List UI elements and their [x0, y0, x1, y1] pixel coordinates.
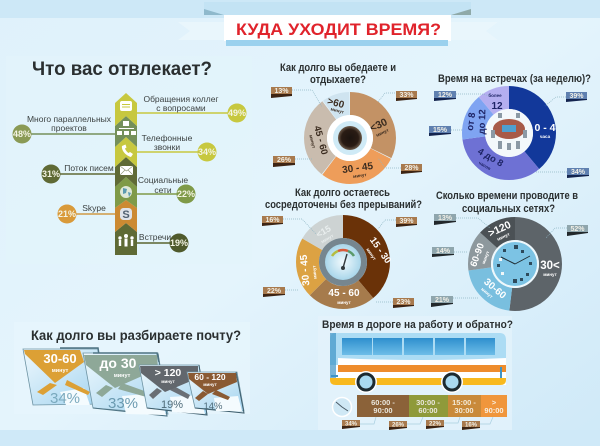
panel: commute	[318, 316, 513, 430]
tag: 26%	[389, 421, 407, 430]
icon: chat	[120, 101, 132, 111]
tag: 16%: 16%	[465, 422, 478, 428]
envelope: 60-120: 60 - 120	[194, 372, 226, 382]
segment labels: lunch: минут	[375, 127, 390, 138]
item: colleagues 49%: 49%	[228, 108, 246, 118]
icon: wheel	[441, 371, 463, 393]
segment labels: meetings: часов	[478, 160, 492, 171]
donut: focus	[308, 226, 378, 298]
panel: distractions	[12, 59, 246, 255]
segment labels: social	[468, 219, 560, 302]
panel: lunch	[271, 62, 422, 179]
tag: 39%: 39%	[569, 93, 584, 100]
item: phone calls 34%: Телефонные	[142, 133, 193, 143]
item: meetings 19%: Встречи	[139, 232, 171, 242]
envelope: >120: минут	[161, 379, 176, 384]
tag: 22%	[263, 287, 285, 297]
tag: 12%	[434, 91, 456, 101]
segment: >90	[481, 395, 507, 417]
segment labels: lunch: <30	[368, 116, 389, 134]
segment: >90: >	[492, 398, 497, 407]
tag: 34%: 34%	[571, 169, 586, 176]
item: meetings 19%: 19%	[170, 238, 188, 248]
tag: 26%: 26%	[277, 157, 292, 164]
tag: 39%	[396, 217, 417, 227]
icon: globe	[120, 186, 132, 198]
heading: social	[436, 190, 578, 215]
icon: people	[118, 234, 134, 246]
segment labels: lunch: >60	[326, 96, 346, 111]
item: skype 21%: Skype	[82, 203, 106, 213]
segment labels: lunch: 30 - 45	[341, 161, 374, 176]
segment: 15-30: 30:00	[454, 406, 474, 415]
segment labels: social: минут	[481, 250, 491, 265]
segment labels: meetings: 0 - 4	[534, 122, 556, 134]
item: skype 21%: 21%	[58, 209, 76, 219]
tag: 34%: 34%	[345, 422, 358, 428]
envelope: до 30: 33%	[108, 395, 138, 412]
envelope: до 30: до 30	[100, 355, 137, 371]
segment labels: lunch: минут	[308, 134, 317, 150]
tag: 15%	[429, 126, 451, 136]
icon: envelope	[120, 166, 133, 175]
segment labels: meetings: до 12	[477, 109, 488, 135]
segment: 15-30	[448, 395, 481, 417]
tag: 14%	[432, 247, 454, 257]
segment labels: focus: минут	[320, 233, 335, 244]
segment labels: social: минут	[480, 287, 494, 300]
envelope: 60-120: минут	[203, 382, 218, 387]
tag: 12%: 12%	[438, 92, 453, 99]
tag: 22%	[426, 420, 444, 429]
segment labels: meetings: от 8	[465, 112, 478, 131]
tag: 22%: 22%	[429, 422, 442, 428]
tag: 13%	[434, 214, 456, 225]
envelope: >120: > 120	[155, 367, 181, 379]
segment labels: meetings: более	[488, 92, 502, 98]
panel: focus	[262, 187, 422, 308]
tag: 14%: 14%	[436, 248, 451, 255]
donut: lunch	[316, 104, 384, 172]
heading: commute: Время в дороге на работу и обратно?	[322, 319, 513, 331]
segment labels: focus	[299, 223, 393, 305]
leaders: social	[453, 218, 567, 298]
connector lines and percent circles	[22, 113, 235, 243]
item: social 22%: сети	[154, 185, 172, 195]
segment labels: focus: минут	[365, 247, 378, 262]
tag: 23%	[393, 298, 414, 308]
icon: hierarchy	[117, 121, 136, 135]
icon: clock	[332, 398, 352, 416]
heading: focus: Как долго остаетесь	[295, 187, 390, 199]
icon: wheel	[355, 371, 377, 393]
tag: 33%: 33%	[399, 92, 414, 99]
title: КУДА УХОДИТ ВРЕМЯ?	[236, 20, 441, 39]
icon: clock	[491, 240, 539, 288]
tag: 39%	[566, 92, 587, 102]
donut: meetings	[474, 98, 544, 168]
segment labels: social: 60-90	[468, 242, 487, 268]
tag: 13%: 13%	[438, 215, 453, 222]
item: parallel projects 48%: проектов	[51, 123, 87, 133]
tag: 34%	[342, 420, 360, 429]
heading: lunch: Как долго вы обедаете и	[280, 62, 396, 74]
tag: 15%: 15%	[433, 127, 448, 134]
heading: lunch	[280, 62, 396, 86]
segment: 60-90: 90:00	[373, 406, 393, 415]
segment labels: lunch: минут	[353, 172, 368, 179]
segment: 30-60: 60:00	[418, 406, 438, 415]
segment labels: social: 30<	[540, 260, 560, 272]
leaders: focus	[283, 219, 396, 302]
tag: 16%	[462, 421, 480, 430]
segment labels: social: минут	[496, 231, 511, 242]
envelope: 30-60	[23, 348, 104, 407]
segment labels: focus: 45 - 60	[328, 288, 360, 299]
item: phone calls 34%: 34%	[198, 147, 216, 157]
segment labels: meetings: 12	[491, 101, 503, 112]
tag: 16%: 16%	[265, 217, 280, 224]
panel: meetings	[429, 73, 591, 178]
tag: 28%: 28%	[404, 165, 419, 172]
item: phone calls 34%: звонки	[154, 142, 180, 152]
segment labels: focus: минут	[311, 264, 318, 279]
item: meetings 19%	[139, 232, 188, 252]
tag: 26%: 26%	[392, 422, 405, 428]
envelope: 60-120: 14%	[203, 401, 223, 412]
icon: coffee cup	[327, 115, 373, 161]
segment: 60-90	[357, 395, 409, 417]
tag: 21%	[431, 296, 453, 307]
panel: mail	[23, 327, 244, 416]
segment labels: meetings	[465, 92, 556, 171]
segment labels: lunch: минут	[330, 106, 345, 115]
envelope: до 30: минут	[114, 373, 131, 379]
segment labels: social: 30-60	[481, 277, 508, 302]
envelope: 60-120	[187, 372, 244, 413]
item: phone calls 34%	[142, 133, 216, 162]
icon: bus	[330, 333, 506, 393]
segment: 30-60: 30:00 -	[416, 398, 440, 407]
tag: 16%	[262, 216, 283, 226]
item: colleagues 49%	[143, 94, 246, 122]
tag: 22%: 22%	[267, 288, 282, 295]
icon: phone	[122, 144, 133, 157]
icon: meeting table	[485, 109, 533, 157]
segment: 60-90: 60:00 -	[371, 398, 395, 407]
heading: focus: сосредоточены без прерываний?	[265, 199, 422, 211]
item: colleagues 49%: Обращения коллег	[143, 94, 219, 104]
segment labels: focus: 15 - 30	[367, 235, 393, 266]
tag: 23%: 23%	[396, 299, 411, 306]
panel: social	[431, 190, 588, 307]
donut: social	[480, 228, 550, 300]
tag: 39%: 39%	[399, 218, 414, 225]
segment labels: focus: 30 - 45	[299, 254, 312, 286]
envelope: 30-60: минут	[52, 368, 69, 374]
tag: 34%	[567, 168, 589, 178]
heading: focus	[265, 187, 422, 211]
segment labels: lunch: 45 - 60	[311, 125, 330, 156]
segment labels: social: >120	[486, 219, 513, 240]
item: social 22%	[138, 175, 196, 204]
segment: 30-60	[409, 395, 448, 417]
segment labels: meetings: 4 до 8	[476, 146, 505, 170]
icon column	[115, 93, 137, 255]
item: parallel projects 48%: 48%	[13, 129, 31, 139]
item: social 22%: Социальные	[138, 175, 188, 185]
heading: lunch: отдыхаете?	[310, 74, 366, 86]
segment labels: focus: <15	[314, 223, 333, 240]
envelope: 30-60: 30-60	[43, 351, 77, 366]
tag: 13%: 13%	[274, 88, 289, 95]
tag: 52%: 52%	[570, 226, 585, 233]
tag: 21%: 21%	[435, 297, 450, 304]
icon: skype	[120, 208, 132, 221]
envelope: >120	[139, 365, 207, 415]
leaders: meetings	[451, 94, 567, 172]
item: email 31%: Поток писем	[64, 163, 114, 173]
segment labels: meetings: часа	[540, 134, 551, 139]
item: parallel projects 48%: Много параллельных	[27, 114, 112, 124]
segment labels: focus: минут	[337, 300, 352, 305]
envelope: 30-60: 34%	[50, 390, 80, 407]
item: email 31%	[42, 163, 114, 184]
icon: skype: S	[122, 209, 130, 221]
heading: social: Сколько времени проводите в	[436, 190, 578, 202]
tag: 13%	[271, 87, 292, 98]
tag: 26%	[273, 156, 295, 167]
segment labels: lunch	[308, 96, 390, 179]
item: social 22%: 22%	[177, 189, 195, 199]
envelope: >120: 19%	[161, 399, 183, 411]
tag: 33%	[396, 91, 417, 101]
item: email 31%: 31%	[42, 169, 60, 179]
segment: >90: 90:00	[484, 406, 504, 415]
item: colleagues 49%: с вопросами	[156, 103, 206, 113]
tag: 28%	[401, 164, 422, 174]
title ribbon	[178, 2, 498, 46]
item: skype 21%	[58, 203, 106, 224]
tag: 52%	[567, 225, 588, 236]
segment: 15-30: 15:00 -	[452, 398, 476, 407]
leaders: lunch	[292, 90, 417, 168]
icon: gauge	[319, 238, 367, 286]
heading: mail: Как долго вы разбираете почту?	[31, 327, 241, 343]
segment labels: social: минут	[543, 272, 558, 277]
envelope: до 30	[83, 353, 168, 416]
leaders: commute	[360, 417, 493, 424]
item: parallel projects 48%	[12, 114, 112, 144]
heading: distractions: Что вас отвлекает?	[32, 59, 212, 80]
heading: social: социальных сетях?	[462, 203, 555, 215]
